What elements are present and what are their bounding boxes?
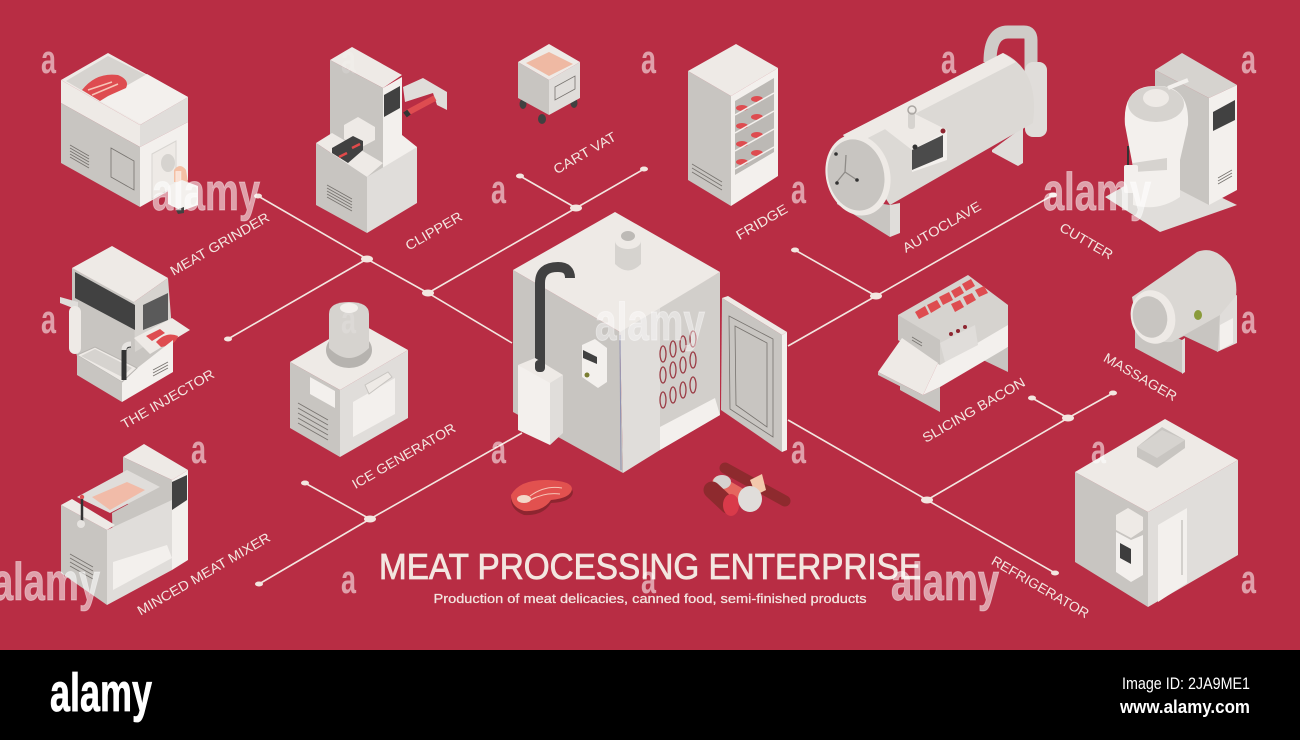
labels: ICE GENERATOR [349, 420, 458, 492]
watermark overlay: a [1241, 298, 1257, 342]
labels: CUTTER [1057, 220, 1116, 262]
icon: raw meat steak [511, 480, 573, 515]
labels: MINCED MEAT MIXER [135, 530, 273, 618]
labels: CART VAT [551, 129, 619, 177]
labels: CLIPPER [403, 209, 465, 253]
watermark overlay: alamy [152, 163, 260, 222]
icon: minced meat mixer [61, 444, 188, 605]
icon: refrigerator [1075, 419, 1238, 607]
watermark overlay: a [1241, 558, 1257, 602]
labels: MEAT GRINDER [168, 209, 272, 279]
icon: massager [1125, 250, 1237, 374]
icon: clipper [316, 47, 447, 233]
watermark overlay: a [341, 38, 357, 82]
watermark overlay: a [41, 38, 57, 82]
icon: slicing bacon [878, 275, 1008, 412]
watermark overlay: a [41, 298, 57, 342]
website: www.alamy.com [1119, 697, 1250, 717]
labels: FRIDGE [733, 201, 790, 243]
watermark overlay: a [941, 38, 957, 82]
footer bar [0, 650, 1300, 740]
icon: fridge [688, 44, 778, 206]
connector lines [224, 166, 1117, 586]
watermark overlay: a [341, 558, 357, 602]
icon: central smokehouse chamber [513, 212, 787, 473]
labels [119, 129, 1180, 621]
icon: ice generator [290, 302, 408, 457]
icon: cart vat [518, 44, 580, 124]
icon: meat grinder [61, 53, 198, 214]
icon: cutter [1105, 53, 1237, 232]
watermark overlay: a [341, 298, 357, 342]
title: MEAT PROCESSING ENTERPRISE [379, 546, 921, 587]
labels: MASSAGER [1101, 350, 1180, 404]
icon: autoclave [817, 32, 1047, 237]
watermark overlay: a [641, 38, 657, 82]
labels: AUTOCLAVE [900, 199, 984, 256]
watermark overlay: a [1241, 38, 1257, 82]
icon: the injector [60, 246, 190, 402]
watermark overlay: alamy [891, 553, 999, 612]
watermark overlay: a [791, 428, 807, 472]
watermark overlay: a [1091, 428, 1107, 472]
labels: REFRIGERATOR [989, 553, 1092, 621]
watermark overlay: a [491, 168, 507, 212]
watermark overlay: a [791, 168, 807, 212]
image id: Image ID: 2JA9ME1 [1122, 674, 1250, 693]
watermark overlay [0, 38, 1257, 612]
labels: THE INJECTOR [119, 366, 217, 432]
watermark overlay: alamy [1043, 163, 1151, 222]
footer logo: alamy [50, 663, 152, 723]
subtitle: Production of meat delicacies, canned food, semi-finished products [434, 592, 866, 606]
icon: sausages and salami [712, 468, 785, 516]
watermark overlay: a [641, 558, 657, 602]
watermark overlay: alamy [595, 293, 705, 352]
labels: SLICING BACON [920, 375, 1028, 446]
watermark overlay: a [491, 428, 507, 472]
watermark overlay: a [191, 428, 207, 472]
